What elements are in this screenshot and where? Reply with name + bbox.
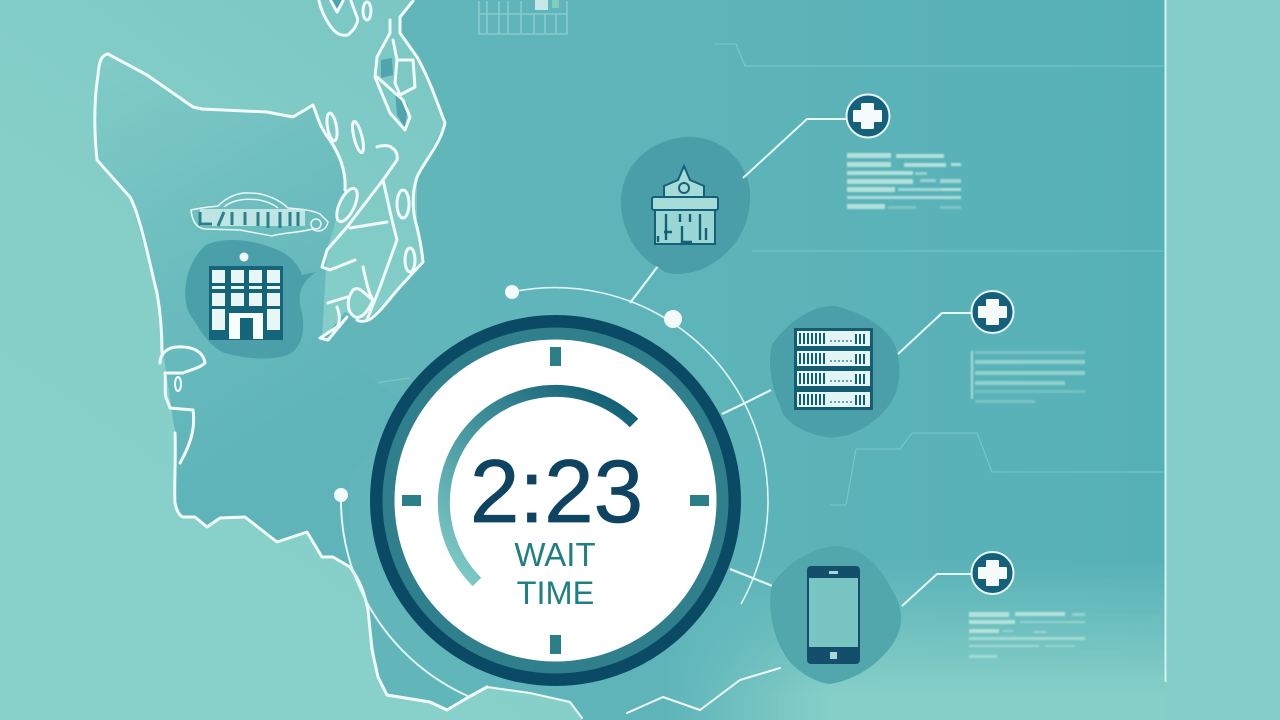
hub: hospital on map: [185, 240, 316, 358]
progress arc: [444, 391, 634, 582]
icon: plus badge 2: [972, 291, 1014, 333]
connector: hub 3 to plus: [902, 574, 972, 606]
clock: [370, 315, 741, 686]
icon: server rack: [794, 328, 873, 410]
icon: faint building at top: [479, 0, 567, 34]
hub 1: building: [621, 137, 750, 274]
map: coastline outline: [95, 1, 780, 718]
clock inner ring: [382, 328, 728, 674]
label: wait: WAIT: [514, 536, 596, 573]
icon: map marker dot: [240, 252, 248, 262]
hub 2: server rack: [770, 306, 899, 437]
connectors from clock to hubs: [630, 266, 775, 587]
orbit arcs: [341, 288, 768, 697]
background: [298, 0, 1166, 720]
clock outer ring: [370, 315, 741, 686]
orbit dots: [334, 285, 682, 502]
map: southern shore fill: [0, 300, 582, 720]
panel: faint circuit lines: [360, 44, 1164, 505]
connector: hub 1 to plus: [743, 119, 846, 178]
clock ticks: [402, 347, 709, 654]
map: inner bay shading: [330, 0, 408, 128]
text block: placeholder lines 2: [971, 351, 1085, 403]
text block: placeholder lines 1: [847, 153, 961, 209]
icon: domed building: [652, 166, 718, 244]
clock face: [394, 340, 716, 662]
map: land region: [95, 54, 400, 567]
icon: smartphone: [807, 566, 860, 664]
connector: hub 2 to plus: [898, 313, 972, 354]
icon: plus badge 1: [846, 94, 890, 138]
time value: 2:23: [470, 441, 643, 541]
icon: hospital building: [209, 266, 283, 340]
label: time: TIME: [517, 575, 594, 611]
icon: plus badge 3: [972, 552, 1014, 594]
hub 3: phone: [770, 546, 901, 684]
icon: car outline: [191, 193, 328, 236]
text block: placeholder lines 3: [969, 612, 1085, 658]
